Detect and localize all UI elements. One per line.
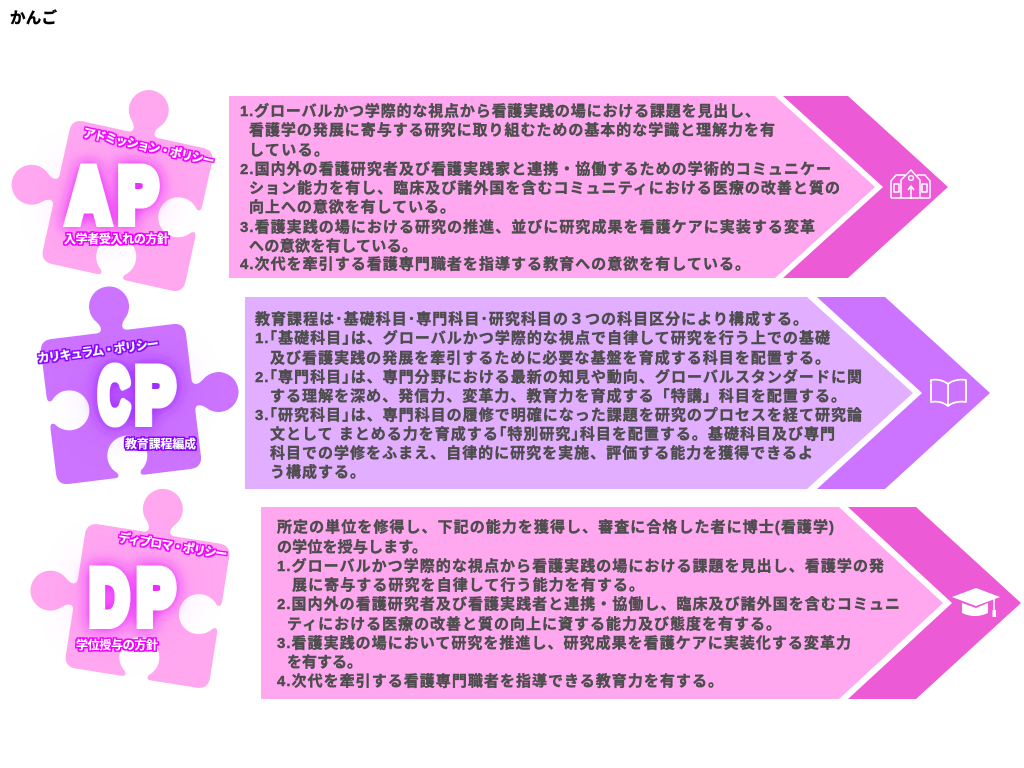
puzzle piece: DP [19,471,238,690]
text block: AP policy: 2.国内外の看護研究者及び看護実践家と連携・協働するための学術的コミュニケー [240,160,831,178]
title: かんご [10,8,57,27]
panel: admission policy [0,65,948,293]
text block: DP policy: 1.グローバルかつ学際的な視点から看護実践の場における課題を見出し、看護学の発 [277,557,884,575]
text block: CP policy [255,310,862,481]
text block: AP policy: 向上への意欲を有している。 [249,199,455,216]
text block: AP policy [240,102,840,273]
text block: CP policy: 教育課程は･基礎科目･専門科目･研究科目の３つの科目区分により構成する。 [255,310,808,328]
puzzle piece: CP [34,272,247,485]
text block: CP policy: 及び看護実践の発展を牽引するために必要な基盤を育成する科目を配置する。 [270,349,830,367]
label: curriculum policy meaning: 教育課程編成 [125,436,196,451]
icon: open book [931,380,966,406]
big letters: AP: P [118,154,158,238]
big letters: CP: P [136,354,174,438]
panel: diploma policy [19,471,1021,699]
big letters: DP: P [137,556,174,640]
text block: DP policy: の学位を授与します。 [277,538,427,556]
text block: AP policy: への意欲を有している。 [249,238,417,255]
big letters: DP: D [90,556,129,640]
big letters: DP [90,556,174,640]
text block: AP policy: 4.次代を牽引する看護専門職者を指導する教育への意欲を有している。 [240,255,750,273]
text block: DP policy: ティにおける医療の改善と質の向上に資する能力及び態度を有する。 [287,615,781,633]
text block: AP policy: ション能力を有し、臨床及び諸外国を含むコミュニティにおける医療の改善と質の [249,179,840,197]
text block: CP policy: する理解を深め、発信力、変革力、教育力を育成する「特講」科目を配置する。 [270,387,846,405]
label: diploma policy name: ディプロマ・ポリシー [117,529,228,562]
text block: DP policy: 所定の単位を修得し、下記の能力を獲得し、審査に合格した者に博士(看護学) [277,518,834,536]
text block: DP policy: 4.次代を牽引する看護専門職者を指導できる教育力を有する。 [277,672,723,690]
label: curriculum policy name: カリキュラム・ポリシー [37,337,160,365]
panel: curriculum policy [34,272,990,489]
arrow body: AP text panel [229,96,875,278]
big letters: AP [68,154,158,238]
text block: CP policy: 科目での学修をふまえ、自律的に研究を実施、評価する能力を獲得できるよ [270,444,813,462]
text block: CP policy: 1.｢基礎科目｣は、グローバルかつ学際的な視点で自律して研究を行う上での基礎 [255,329,830,347]
text block: DP policy: 3.看護実践の場において研究を推進し、研究成果を看護ケアに実装化する変革力 [277,634,851,652]
puzzle piece: AP [0,65,224,293]
text block: CP policy: 3.｢研究科目｣は、専門科目の履修で明確になった課題を研究のプロセスを経て研究論 [255,406,862,424]
label: diploma policy meaning: 学位授与の方針 [76,637,158,652]
text block: DP policy [277,518,900,690]
text block: AP policy: 1.グローバルかつ学際的な視点から看護実践の場における課題を見出し、 [240,102,760,120]
arrow chevron: DP [848,507,1021,699]
arrow chevron: AP [783,96,948,278]
text block: CP policy: 文として まとめる力を育成する｢特別研究｣科目を配置する。基礎科目及び専門 [270,425,835,443]
arrow body: DP text panel [261,507,943,699]
text block: DP policy: 展に寄与する研究を自律して行う能力を有する。 [292,576,644,594]
text block: DP policy: 2.国内外の看護研究者及び看護実践者と連携・協働し、臨床及び諸外国を含むコミュニ [277,595,900,613]
icon: school [891,170,930,199]
label: admission policy meaning: 入学者受入れの方針 [64,231,169,246]
arrow body: CP text panel [245,297,913,489]
text block: CP policy: 2.｢専門科目｣は、専門分野における最新の知見や動向、グローバルスタンダードに関 [255,368,862,386]
arrow chevron: CP [817,297,990,489]
text block: AP policy: 看護学の発展に寄与する研究に取り組むための基本的な学識と理解力を有 [249,121,775,139]
text block: CP policy: う構成する。 [270,463,365,481]
big letters: CP: C [98,354,130,438]
label: admission policy name: アドミッション・ポリシー [82,126,216,168]
text block: AP policy: 3.看護実践の場における研究の推進、並びに研究成果を看護ケアに実装する変革 [240,218,815,236]
icon: graduation cap [952,588,1000,617]
text block: DP policy: を有する。 [287,654,362,671]
text block: AP policy: している。 [249,142,329,159]
big letters: AP: A [68,154,110,238]
